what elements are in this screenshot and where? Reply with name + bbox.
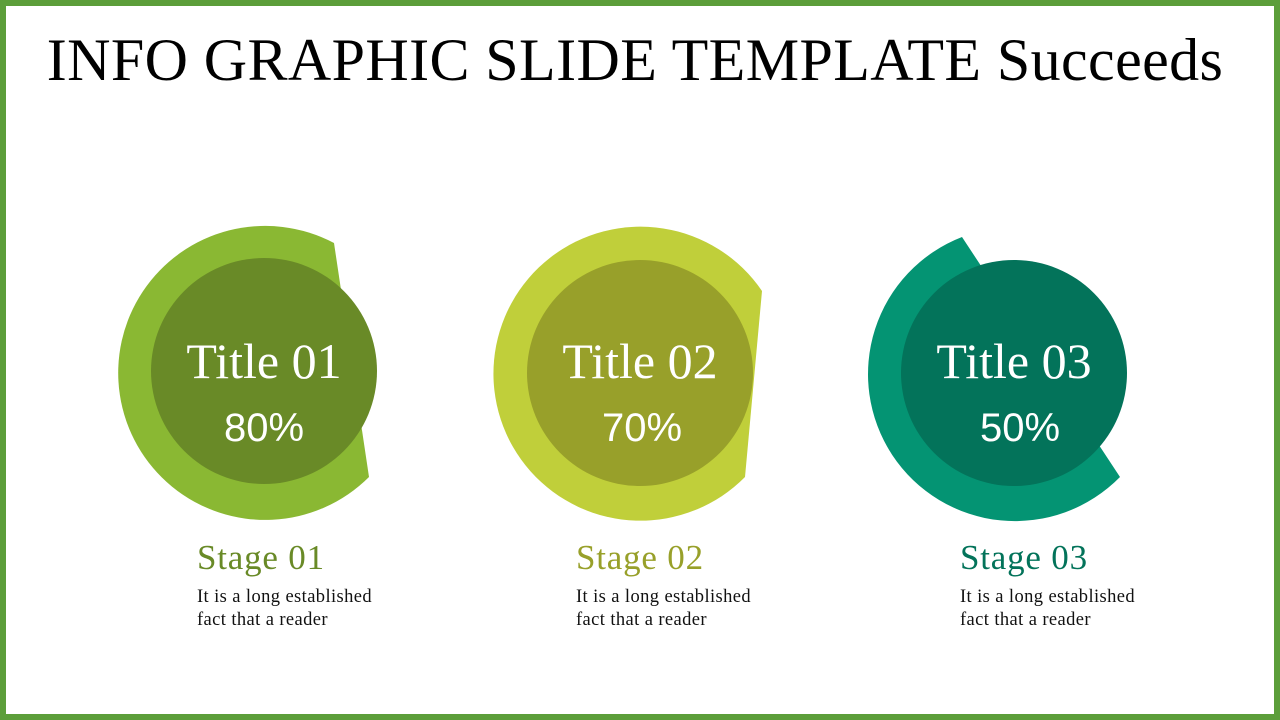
circle 1: Title 01 [186, 333, 342, 389]
stage 2 text: It is a long established [576, 587, 751, 607]
circle 2: Title 02 [562, 333, 718, 389]
stage 2 text [576, 587, 751, 630]
stage 1 heading: Stage 01 [197, 538, 325, 577]
stage 2 heading: Stage 02 [576, 538, 704, 577]
circle 3 [868, 237, 1127, 521]
circle 2 [493, 227, 762, 521]
circle 3: Title 03 [936, 333, 1092, 389]
stage 1 text: fact that a reader [197, 610, 328, 630]
stage 3 text: fact that a reader [960, 610, 1091, 630]
circle 1 [118, 226, 377, 520]
stage 1 text [197, 587, 372, 630]
title: INFO GRAPHIC SLIDE TEMPLATE Succeeds [47, 27, 1223, 93]
stage 1 text: It is a long established [197, 587, 372, 607]
circle 3: 50% [980, 406, 1060, 450]
stage 3 heading: Stage 03 [960, 538, 1088, 577]
circle 1: 80% [224, 406, 304, 450]
stage 3 text: It is a long established [960, 587, 1135, 607]
stage 2 text: fact that a reader [576, 610, 707, 630]
stage 3 text [960, 587, 1135, 630]
circle 2: 70% [602, 406, 682, 450]
